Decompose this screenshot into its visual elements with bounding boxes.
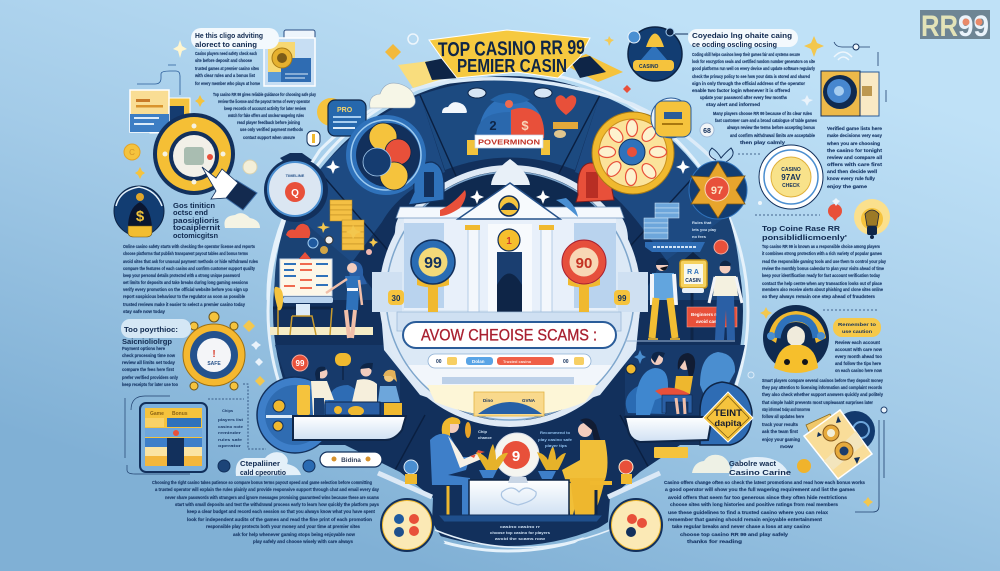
heading: lower right: Gabolre wact [729,459,777,468]
round badge [759,145,823,209]
paragraph: right narrow [826,126,882,190]
paragraph: top left second: use only verified payment methods [240,127,303,133]
central women table scene: 9 [512,448,520,465]
right sector pair with kiosk: avoid casino [696,319,724,324]
heading: left middle: octomicgitsn [173,231,218,240]
right ornaments: 68 [703,128,711,135]
paragraph: left middle: report suspicious behaviour to the regulator as soon as possible [123,294,245,300]
tablet side notes: rules safe [218,437,243,442]
paragraph: top right: enable two factor login whenever it is offered [692,88,790,94]
building [372,183,648,312]
gold wheel: SAFE [207,361,221,367]
paragraph: left middle: avoid sites that ask for unusual payment methods or hide withdrawal rules [123,259,258,265]
yellow note pill [833,318,881,337]
paragraph: top left: Casino players need safety check each [195,51,257,57]
bottom arc strip [378,473,660,548]
top right emblem [628,27,688,81]
center shield: blue and red dome [467,93,550,155]
paragraph: top right second: and confirm withdrawal limits are acceptable [730,133,815,139]
paragraph: pill text: every month ahead too [835,354,882,360]
paragraph: top right second: Many players choose RR 99 because of its clear rules [713,111,812,117]
round badge: CHECK [782,183,800,189]
heading: left lower: Saicnioliolrgp [122,337,172,346]
yellow block [654,447,688,458]
blue 99 chip on stand: 99 [424,255,442,272]
dots and heading cloud lower left [218,452,315,476]
paragraph: bottom left: start with small deposits and test the withdrawal process early to learn how quickly the platform pays [175,502,379,508]
paragraph: top left [194,51,260,87]
side diamonds [243,320,265,386]
paragraph: top left second: Top casino RR 99 gives reliable guidance for choosing safe play [213,92,316,98]
left shelf [293,416,406,440]
coin stacks left [330,200,364,250]
paragraph: bottom left: a trusted operator will explain the rules plainly and provide responsive support through chat and email every day [155,487,379,493]
money bag icon: $ [136,208,145,225]
center small annotations: Recommend to [540,430,571,435]
paragraph: top right: look for encryption seals and certified random number generators on site [692,59,815,65]
star emblem [689,148,747,219]
paragraph: left lower: check processing time now [122,353,175,359]
left people meeting scene [292,353,402,416]
watermark logo RR99 [920,10,990,43]
gold wheel: ! [212,349,216,360]
paragraph: right lower: they pay attention to licensing information and complaint records [762,385,882,391]
heading: left lower: Too poyrthioc: [124,325,178,334]
paragraph: left middle: trusted reviews make it easier to select a premier casino today [123,302,245,308]
tablet side notes: Chips [222,408,234,413]
paragraph: bottom right: take regular breaks and never chase a loss at any casino [672,524,810,530]
stars [470,190,550,204]
paragraph: right lower: enjoy your gaming [762,437,800,443]
left top pill [191,28,279,49]
paragraph: right narrow: offers with care first [827,162,882,168]
info pills: Trusted casino [503,359,532,364]
heading: right middle [762,224,847,242]
money bag icon [114,186,164,237]
heading: right middle: ponsiblidlicmoenly' [762,233,847,242]
tablet side notes: casino note [218,424,244,429]
paragraph: bottom right: use these guidelines to find a trusted casino where you can relax [668,510,828,516]
right frame line [748,372,887,512]
paragraph: top right: Coding skill helps casinos keep their games fair and systems secure [692,52,800,58]
ovals, heart, cloud in top sector [442,88,578,138]
right ribbon tail [563,54,623,82]
paragraph: pill text [835,340,882,374]
paragraph: bottom right: avoid offers that seem far too generous since they often hide restrictions [668,495,847,501]
tablet side notes: reminder [218,430,242,435]
avoid scams banner: AVOW CHEOISE SCAMS : [421,326,597,344]
paragraph: bottom left: play safely and choose wisely with care always [253,539,353,545]
heading: top right: Coyedaio lng ohaite caing [692,31,793,40]
paragraph: top right: check the privacy policy to see how your data is stored and shared [692,74,810,80]
paragraph: right middle [762,244,886,300]
potted plants [476,444,566,479]
warning sign [703,392,753,442]
paragraph: top right: update your password after every few months [700,95,787,101]
connector dashed [208,384,266,449]
center small annotations: choose top casino for players [490,530,551,535]
paragraph: pill text: and follow the tips here [835,361,881,367]
right sector pair with kiosk: Beginners must [691,312,726,317]
heading: lower left [240,459,286,477]
notes under star: Rules that [692,220,712,225]
watermark logo RR99: RR [921,10,958,43]
central navy medallion [268,71,748,551]
paragraph: bottom left: responsible play protects both your money and your time at premier sites [206,524,360,530]
paragraph: right middle: keep your identification ready for fast account verification today [762,273,880,279]
heading: right middle: Top Coine Rase RR [762,224,841,233]
heading: lower left: cald cpeorutio [240,468,286,477]
heading: top left: alorect to caning [195,40,258,49]
title banner: TOP CASINO RR 99 [438,37,585,61]
cloud with coin, right [692,455,811,476]
heading: left lower [122,325,178,346]
paragraph: bottom left [152,480,379,545]
spokes and light arc [268,79,730,470]
paragraph: left middle: choose platforms that publish transparent payout tables and bonus terms [123,251,248,257]
heading: left middle [173,201,221,240]
info pills: Dolan [472,359,485,364]
paragraph: right narrow: know every rule fully [827,176,875,182]
paragraph: left middle: compare the features of each casino and confirm customer support quality [123,266,255,272]
right shelf [625,417,712,442]
heading: left middle: Gos tiniticn [173,201,215,210]
tablet side notes [218,408,244,448]
blue 99 chip on stand [411,240,455,312]
paragraph: right middle: it combines strong protection with a rich variety of popular games [762,251,882,257]
left people meeting scene: 99 [296,359,305,368]
paragraph: top right: stay alert and informed [706,102,760,108]
red 90 chip on stand [562,240,606,312]
paragraph: right lower: Smart players compare several casinos before they deposit money [762,378,883,384]
warning sign: dapita [714,419,742,428]
info pills [428,354,591,368]
center small annotations: chance [478,435,493,440]
right ornaments [700,36,886,137]
paragraph: bottom left: keep a clear budget and record each session so that you always know what you have spent [187,509,375,515]
bonus pill [320,452,382,467]
roulette wheel [592,112,674,194]
paragraph: right lower: now [780,445,793,450]
center small annotations: play casino safe [538,437,573,442]
paragraph: right middle: Top casino RR 99 is known as a responsible choice among players [762,244,880,250]
heading: left middle: tocaiplernit [173,223,221,232]
playing card with chips [804,410,875,479]
paragraph: bottom right: choose top casino RR 99 and play safely [680,532,788,538]
paragraph: left middle: verify every promotion on the official website before you sign up [123,287,248,293]
paragraph: bottom right: a good operator will show you the full wagering requirement and list the games [665,487,855,493]
paragraph: top left second: contact support when unsure [243,135,295,141]
center small annotations [478,429,573,541]
right sector pair with kiosk [625,240,742,341]
paragraph: right lower: follow all updates here [762,414,804,420]
paragraph: top right second: always review the terms before accepting bonus [727,125,815,131]
paragraph: pill text: Review each account [835,340,880,346]
paragraph: pill text: account with care now [835,347,882,353]
tablet: Bonus [172,411,188,417]
paragraph: right lower [762,378,883,450]
right framed card [821,71,879,116]
bonus pill: Bidina [341,457,361,464]
paragraph: top left second: read player feedback before joining [237,120,300,126]
paragraph: left lower: compare the fees here first [122,367,174,373]
watermark logo RR99: 99 [958,10,989,43]
PRO speech card [307,98,366,146]
paragraph: bottom right: choose sites with long histories and positive ratings from real members [670,502,838,508]
title sparkle and diamond [385,34,631,93]
balloon and dashed line [738,154,842,221]
white cloud on arc [370,83,415,108]
heading: top left [195,31,263,49]
timer icon: TIMELINE [286,173,305,178]
paragraph: bottom right: Casino offers change often so check the latest promotions and read how each bonus works [664,480,865,486]
paragraph: right middle: review the monthly bonus calendar to plan your visits ahead of time [762,266,884,272]
star emblem: 97 [711,185,723,197]
lightbulb [854,199,890,239]
lower strip and mini sign: GVNA [522,398,536,403]
center shield: blue and red dome: POVERMINON [478,138,540,146]
notes under star: lets you play [692,227,717,232]
paragraph: right narrow: when you are choosing [826,141,880,147]
side tags 30 [388,290,630,305]
connector line [137,65,180,95]
paragraph: left middle: set limits for deposits and take breaks during long gaming sessions [123,280,248,286]
paragraph: left lower: review all limits set today [122,360,175,366]
tablet side notes: players list [218,417,244,422]
paragraph: bottom left: look for independent audits of the games and read the fine print of each promotion [187,517,372,523]
center small annotations: Chip [478,429,487,434]
center small annotations: player tips [545,443,568,448]
paragraph: right middle: members also receive alerts about phishing and clone sites online [762,287,883,293]
paragraph: right narrow: enjoy the game [827,184,867,190]
title banner [398,30,623,88]
paragraph: top right [692,52,815,108]
heading: lower left: Ctepaliiner [240,459,280,468]
top right emblem: CASINO [639,64,659,70]
coin stacks right [644,203,679,239]
notes under star: no fees [692,234,707,239]
gold button with hand [153,113,257,210]
left pill [121,319,191,338]
round badge: CASINO [781,167,801,173]
paragraph: top left second [213,92,316,141]
center small annotations: casino casino rr [500,524,541,529]
tablet: Game [150,411,164,417]
round badge: 97AV [781,173,801,182]
paragraph: left lower: prefer verified providers only [122,375,178,381]
timer icon: Q [291,188,299,199]
paragraph: right lower: they also check whether support answers quickly and politely [762,392,883,398]
paragraph: top left second: watch for fake offers and unclear wagering rules [227,113,304,119]
paragraph: left middle: stay safe now today [123,309,165,315]
magnifier scene [372,159,648,425]
paragraph: right middle: contact the help centre when any transaction looks out of place [762,281,882,287]
paragraph: left lower [122,346,178,388]
paragraph: top left: trusted games at premier casino sites [195,66,259,72]
heading: top right: ce ocding oscling ocsing [692,40,777,49]
paragraph: bottom right: thanks for reading [687,539,742,545]
paragraph: bottom right [664,480,865,545]
paragraph: top left: for every member who plays at home [195,81,260,87]
right sector pair with kiosk: CASIN [685,278,701,284]
top left card [264,30,315,86]
paragraph: left middle [123,244,258,315]
gold coin and sparkles: C [129,148,135,157]
left ribbon tail [398,60,452,88]
blue half circle dial [257,377,333,453]
paragraph: right lower: that simple habit prevents most unpleasant surprises later [762,400,873,406]
paragraph: right narrow: the casino for tonight [827,148,882,154]
venn badge [346,115,426,195]
paragraph: bottom right: remember that gaming should remain enjoyable entertainment [668,517,822,523]
bottom left circle chart [381,499,433,551]
info pills: 00 [563,359,569,365]
left sector ornaments [286,160,690,255]
paragraph: right middle: read the responsible gaming tools and use them to control your play [762,259,886,265]
tablet side notes: operator [218,443,242,448]
heading: top left: He this cligo adviting [195,31,263,40]
yellow note pill: Remember to [838,322,876,327]
blue padlock arm [408,162,466,216]
timer icon [264,153,328,222]
heading: left middle: octsc end [173,208,208,217]
center shield: blue and red dome: 2 [489,118,497,133]
left small cards [130,90,190,133]
warning sign: TEINT [714,408,743,418]
notes under star [692,220,717,239]
paragraph: top right second: then play calmly [740,140,785,146]
gold wheel [183,312,245,390]
lower right light panel [575,445,790,571]
paragraph: top right second: fast customer care and a broad catalogue of table games [715,118,817,124]
building: 1 [506,236,512,247]
profile circle icon [760,305,878,373]
gold coin and sparkles [124,40,257,179]
yellow badge card [651,98,691,138]
cloud left [224,213,260,228]
paragraph: left middle: keep your personal details protected with a strong unique password [123,273,240,279]
avoid scams banner [403,322,616,348]
center small annotations: avoid the scams now [495,536,546,541]
yellow note pill: use caution [842,329,872,334]
center shield: blue and red dome: $ [521,118,529,133]
paragraph: left lower: keep receipts for later use too [122,382,178,388]
paragraph: bottom left: never share passwords with strangers and ignore messages promising guaranteed wins because these are scams [165,495,379,501]
side tags 30: 30 [392,294,401,303]
small lamp icons [404,460,633,484]
paragraph: top right: sign in only through the official address of the operator [692,81,805,87]
paragraph: top left second: keep records of account activity for later review [224,106,306,112]
title banner: PEMIER CASIN [457,56,567,76]
paragraph: right lower: ask the team first [762,429,798,435]
side tags 30: 99 [618,294,627,303]
paragraph: top left: site before deposit and choose [195,58,252,64]
paragraph: top right second [713,111,817,146]
right top pill [688,29,798,47]
paragraph: right narrow: review and compare all [827,155,882,161]
paragraph: right narrow: make decisions very easy [827,133,882,139]
bottom right circle chart [610,499,662,551]
central women table scene [430,417,612,522]
right people scene [626,350,735,415]
paragraph: right narrow: Verified game lists here [827,126,882,132]
heading: left middle: paosiglioris [173,216,219,225]
heading: lower right [729,459,791,477]
info pills: 00 [436,359,442,365]
heading: top right [692,31,793,49]
coin on pedestal [465,422,471,438]
PRO speech card: PRO [337,107,353,114]
paragraph: top right: good platforms run well on every device and update software regularly [692,66,815,72]
paragraph: right narrow: and then decide well [827,169,877,175]
lower strip and mini sign: Dino [483,398,493,403]
paragraph: pill text: on each casino here now [835,368,882,374]
platform [397,312,621,331]
heading: lower right: Casino Carine [729,468,791,477]
paragraph: top left: with clear rules and a bonus list [194,73,255,79]
paragraph: bottom left: Choosing the right casino takes patience so compare bonus terms payout speed and game selection before committing [152,480,372,486]
lower left light panel [235,445,445,571]
paragraph: left middle: Online casino safety starts with checking the operator license and reports [123,244,255,250]
red padlock arm [556,163,614,217]
paragraph: left lower: Payment options here [122,346,165,352]
red 90 chip on stand: 90 [576,255,592,272]
presentation board with woman [270,252,373,338]
paragraph: top left second: review the license and the payout terms of every operator [218,99,310,105]
paragraph: right lower: track your results [762,422,798,428]
paragraph: bottom left: ask for help whenever gaming stops being enjoyable now [233,532,355,538]
dome [491,159,530,185]
right sector pair with kiosk: R A [687,269,699,276]
paragraph: right lower: stay informed today and tomorrow [762,407,810,413]
paragraph: right middle: so they always remain one step ahead of fraudsters [762,294,875,300]
right cloud navy base [700,382,752,445]
lower strip and mini sign [427,377,597,417]
tablet [125,396,207,474]
